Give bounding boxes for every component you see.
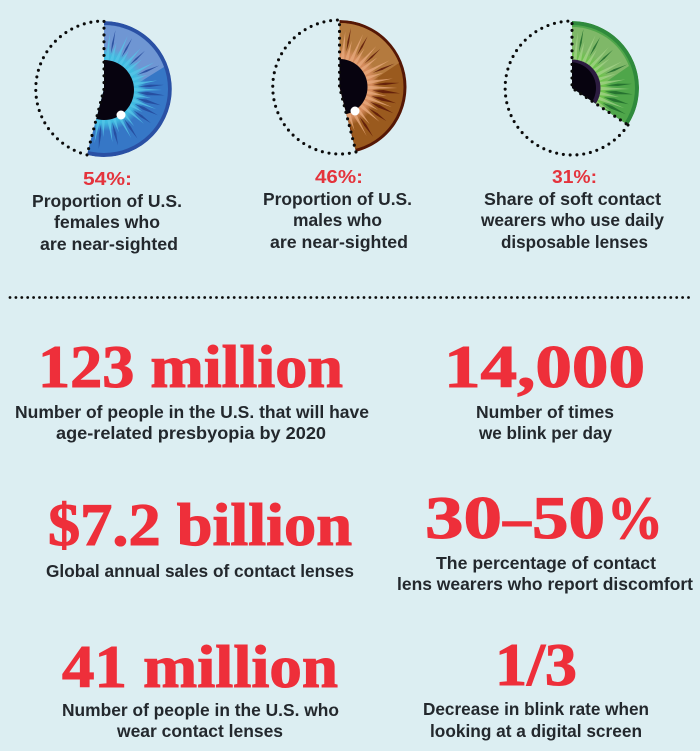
stat: 14,000: 14,000	[444, 334, 645, 400]
text block: 46% males: Proportion of U.S.	[263, 189, 412, 209]
stat: 123 million: 123 million	[38, 334, 343, 400]
stat: 30–50%: The percentage of contact	[436, 553, 656, 573]
stat: 123 million: age-related presbyopia by 2020	[56, 423, 326, 443]
stat: 30–50%	[397, 485, 693, 594]
icon: blue iris wedge	[87, 21, 172, 157]
text block: 54% females: are near-sighted	[40, 234, 178, 254]
stat: 123 million	[15, 334, 369, 443]
stat: 1/3: Decrease in blink rate when	[423, 699, 649, 719]
icon: green iris wedge	[572, 21, 639, 124]
text block: 54% females: Proportion of U.S.	[32, 191, 182, 211]
stat: 1/3	[423, 632, 649, 741]
icon: brown eye glint	[350, 106, 360, 116]
dotted pie outline	[273, 20, 356, 154]
text block: 46% males	[263, 166, 412, 252]
dotted pie outline	[505, 21, 628, 155]
icon: brown iris wedge	[340, 20, 406, 152]
text block: 46% males: 46%:	[315, 166, 363, 187]
stat: 41 million: 41 million	[62, 634, 338, 700]
panel: green eye 31%	[505, 21, 639, 155]
stat: 30–50%: 30	[425, 485, 502, 551]
stat: $7.2 billion	[46, 492, 354, 581]
panel: brown eye 46%	[272, 20, 406, 154]
text block: 31% daily disposable: disposable lenses	[501, 232, 648, 252]
text block: 54% females: females who	[54, 212, 160, 232]
stat: 41 million: Number of people in the U.S. who	[62, 700, 339, 720]
stat: 14,000: Number of times	[476, 402, 614, 422]
text block: 54% females	[32, 168, 182, 254]
stat: 30–50%: lens wearers who report discomfort	[397, 574, 693, 594]
stat: 1/3: looking at a digital screen	[430, 721, 642, 741]
stat: 41 million: wear contact lenses	[116, 721, 283, 741]
stat: 30–50%: 50	[532, 485, 605, 551]
stat: 41 million	[62, 634, 339, 741]
text block: 46% males: males who	[293, 210, 382, 230]
stat: 30–50%: –	[502, 485, 532, 551]
text block: 54% females: 54%:	[83, 168, 132, 189]
stat: $7.2 billion: Global annual sales of contact lenses	[46, 561, 354, 581]
text block: 31% daily disposable	[480, 166, 664, 252]
text block: 46% males: are near-sighted	[270, 232, 408, 252]
stat: 14,000	[444, 334, 645, 443]
icon: blue eye glint	[116, 110, 126, 120]
dotted pie outline	[36, 21, 104, 155]
stat: 1/3: 1/3	[495, 632, 577, 698]
stat: 30–50%: %	[607, 485, 663, 551]
panel: blue eye 54%	[36, 21, 172, 157]
stat: 14,000: we blink per day	[478, 423, 612, 443]
stat: $7.2 billion: $7.2 billion	[48, 492, 352, 558]
text block: 31% daily disposable: 31%:	[552, 166, 597, 187]
stat: 123 million: Number of people in the U.S. that will have	[15, 402, 369, 422]
text block: 31% daily disposable: Share of soft contact	[484, 189, 661, 209]
text block: 31% daily disposable: wearers who use daily	[480, 210, 664, 230]
